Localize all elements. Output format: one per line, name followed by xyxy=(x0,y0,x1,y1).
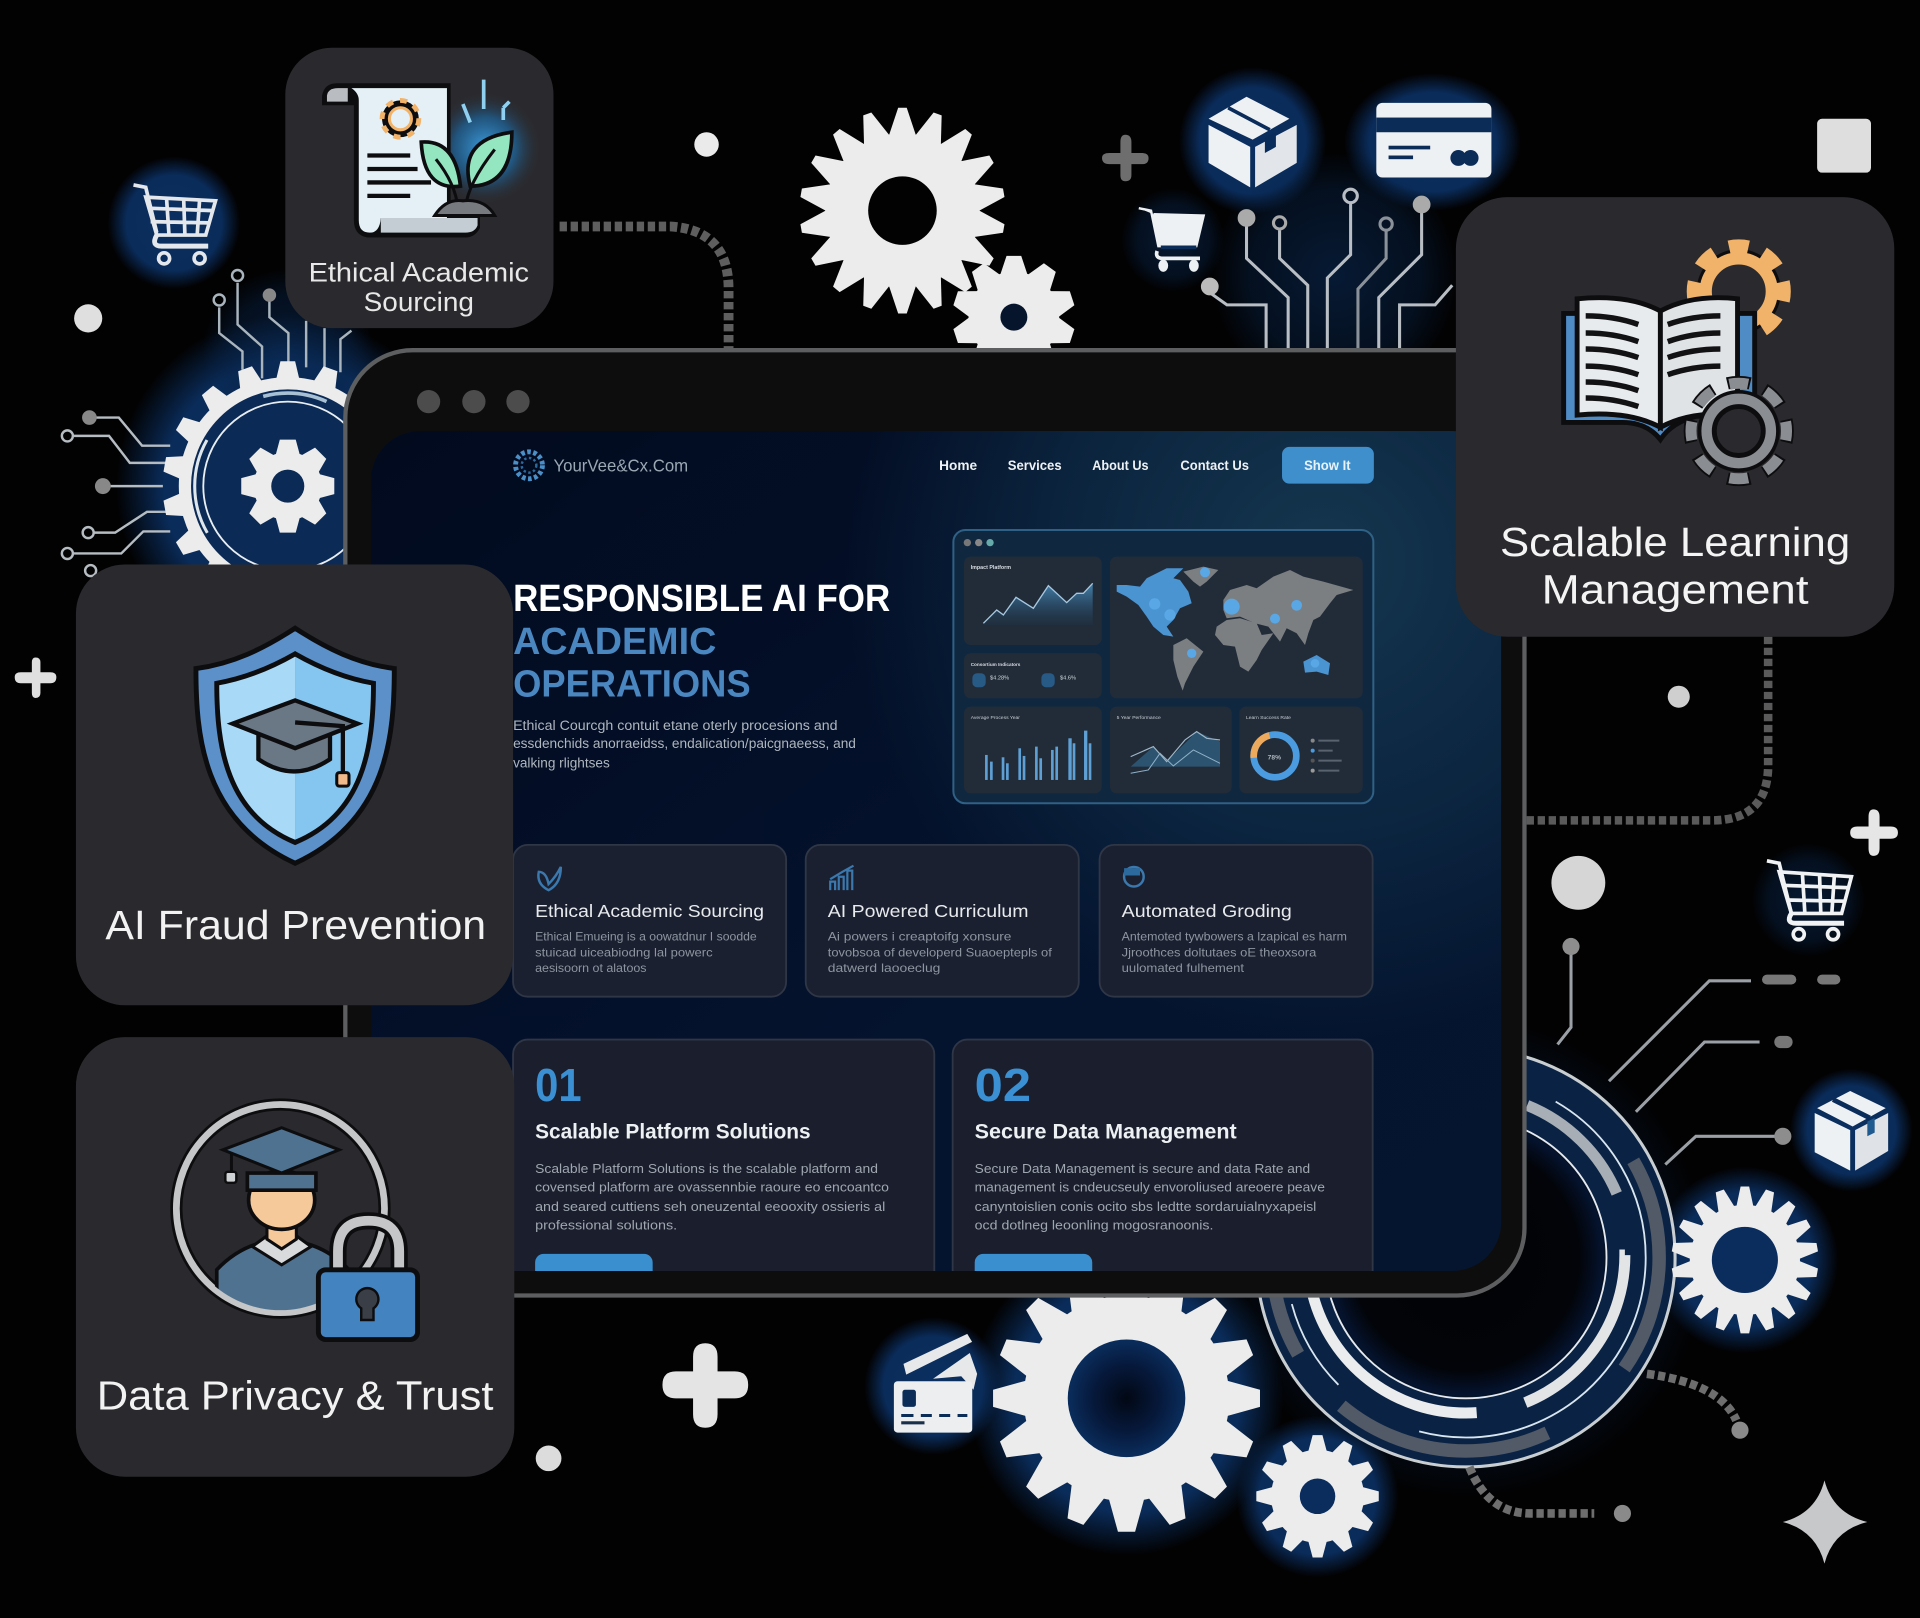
feature card: Ethical Academic Sourcing: Ethical Emueing is a oowatdnur I soodde xyxy=(535,929,757,943)
decorative large dot right xyxy=(1551,856,1605,910)
plus: right xyxy=(1850,809,1898,856)
card label: AI Fraud Prevention xyxy=(105,902,486,948)
bar chart: Average Process Year xyxy=(971,715,1020,721)
gear: large left with inner gear xyxy=(163,361,413,611)
dashed connector ring to dot bottom xyxy=(1469,1467,1631,1522)
decorative dot bottom xyxy=(536,1445,561,1471)
button: Show It: Show It xyxy=(1304,458,1351,473)
card: 02 Secure Data Management: canyntoislien conis ocito sbs ledtte sordaruialnyxapeisl xyxy=(975,1199,1316,1214)
circuit lines left xyxy=(62,411,179,576)
feature card: AI Powered Curriculum: AI Powered Curriculum xyxy=(828,901,1029,921)
panel: tablet frame xyxy=(345,350,1524,1297)
feature card: AI Powered Curriculum: tovobsoa of developerd Suaoeptepls of xyxy=(828,945,1052,959)
navigation xyxy=(940,460,1248,470)
card: 01 Scalable Platform Solutions: 01 xyxy=(535,1059,582,1111)
plus: top grey xyxy=(1102,135,1149,181)
card label: Scalable Learning xyxy=(1500,519,1850,565)
panel: Data Privacy & Trust xyxy=(76,1037,514,1477)
card label xyxy=(1500,519,1850,613)
hero paragraph: Ethical Courcgh contuit etane oterly procesions and xyxy=(513,718,838,733)
card: 01 Scalable Platform Solutions xyxy=(513,1040,934,1297)
hero paragraph: essdenchids anorraeidss, endalication/paicgnaeess, and xyxy=(513,736,856,751)
feature card: Ethical Academic Sourcing: Ethical Academic Sourcing xyxy=(535,901,764,921)
feature card: Ethical Academic Sourcing xyxy=(513,845,786,997)
panel: web page screen xyxy=(371,431,1501,1297)
card: 02 Secure Data Management xyxy=(953,1040,1373,1297)
card label: Ethical Academic xyxy=(309,258,529,288)
area chart: Impact Platform xyxy=(971,565,1011,571)
circuit lines top xyxy=(1202,189,1452,350)
feature card: AI Powered Curriculum: Ai powers i creaptoifg xonsure xyxy=(828,929,1012,943)
card: 01 Scalable Platform Solutions: Scalable Platform Solutions xyxy=(535,1121,811,1144)
icon: scroll with plant xyxy=(322,80,541,238)
icon: credit card bottom xyxy=(894,1333,977,1433)
feature card: Automated Grading: uulomated fulhement xyxy=(1122,961,1245,975)
card: 02 Secure Data Management: ocd dotlneg leoonling mogosranoonis. xyxy=(975,1217,1213,1232)
dashed connector ring to dot right xyxy=(1647,1374,1749,1439)
icon: orange gear xyxy=(1693,246,1784,337)
decorative dot top xyxy=(694,132,719,157)
navigation: Contact Us xyxy=(1180,458,1249,473)
feature card: AI Powered Curriculum: datwerd laooeclug xyxy=(828,961,941,975)
plus: bottom large xyxy=(662,1343,748,1428)
card label: Management xyxy=(1542,567,1809,613)
plus: left xyxy=(15,658,56,698)
gear: top large xyxy=(799,108,1006,313)
hero paragraph: valking rlightses xyxy=(513,756,610,771)
icon: shield with graduation cap xyxy=(196,628,394,863)
dashed connector top left xyxy=(560,227,729,350)
feature card: Ethical Academic Sourcing: aesisoorn ot alatoos xyxy=(535,961,647,975)
icon: cart right xyxy=(1767,861,1851,940)
area chart xyxy=(971,565,1093,625)
button: Show It xyxy=(1282,447,1374,484)
line chart: 5 Year Performance xyxy=(1117,715,1161,721)
card: 01 Scalable Platform Solutions: Scalable Platform Solutions is the scalable platform and xyxy=(535,1161,878,1176)
decorative square top right xyxy=(1817,119,1871,173)
stats xyxy=(971,662,1076,687)
card label xyxy=(309,258,529,317)
card: 01 Scalable Platform Solutions: covensed platform are ovassennbie raoure eo encoantco xyxy=(535,1179,889,1194)
card: 01 Scalable Platform Solutions: professional solutions. xyxy=(535,1217,677,1232)
feature card: Ethical Academic Sourcing: stuicad uiceabiodng lal powerc xyxy=(535,945,713,959)
stats: $4.28% xyxy=(990,675,1009,681)
card label: Sourcing xyxy=(364,287,474,317)
hero heading: OPERATIONS xyxy=(513,664,751,706)
card: 02 Secure Data Management: Secure Data Management xyxy=(975,1121,1237,1144)
bar chart xyxy=(971,715,1091,780)
site logo: YourVee&Cx.Com xyxy=(553,455,688,475)
world map xyxy=(1117,567,1353,691)
icon: parcel box right xyxy=(1815,1091,1888,1171)
card: 02 Secure Data Management: 02 xyxy=(975,1059,1031,1111)
stats: Consortium Indicators xyxy=(971,662,1021,667)
icon: shopping cart top left xyxy=(133,185,216,264)
gear: bottom large xyxy=(993,1265,1260,1532)
stats: $4.6% xyxy=(1060,675,1076,681)
dashed connector right xyxy=(1524,637,1768,820)
card: 02 Secure Data Management: management is cndeucseuly envoroliused areoere peave xyxy=(975,1179,1325,1194)
hero paragraph xyxy=(513,718,856,771)
card: 02 Secure Data Management: Secure Data Management is secure and data Rate and xyxy=(975,1161,1310,1176)
icon: parcel box top xyxy=(1209,97,1297,187)
donut chart: Learn Success Rate xyxy=(1246,715,1291,721)
hero heading: RESPONSIBLE AI FOR xyxy=(513,578,890,620)
donut chart xyxy=(1246,715,1342,777)
star bottom right xyxy=(1783,1480,1867,1564)
circuit lines top left xyxy=(214,270,351,378)
icon: credit card top xyxy=(1376,103,1491,178)
navigation: About Us xyxy=(1092,458,1149,473)
feature card: Automated Grading xyxy=(1100,845,1373,997)
hero heading: ACADEMIC xyxy=(513,621,716,663)
gear: bottom small xyxy=(1256,1435,1379,1558)
gear: top small xyxy=(951,256,1076,378)
gear: right xyxy=(1671,1187,1819,1333)
icon: open book xyxy=(1564,298,1755,440)
feature card: Automated Grading: Antemoted tywbowers a lzapical es harm xyxy=(1122,929,1347,943)
icon: white cart top xyxy=(1139,208,1204,272)
navigation: Home xyxy=(939,458,978,473)
donut chart: 78% xyxy=(1268,754,1281,761)
panel: dashboard xyxy=(953,530,1373,803)
panel: Scalable Learning Management xyxy=(1456,197,1894,637)
feature card: Automated Grading: Jjroothces doltutaes oE theoxsora xyxy=(1122,945,1317,959)
panel: Ethical Academic Sourcing xyxy=(285,48,553,328)
icon: grey gear xyxy=(1690,382,1788,480)
decorative dot left xyxy=(74,304,102,332)
feature card: AI Powered Curriculum xyxy=(806,845,1079,997)
decorative dot right xyxy=(1668,686,1690,708)
circuit lines bottom right xyxy=(1558,938,1840,1164)
card label: Data Privacy & Trust xyxy=(97,1372,493,1418)
panel: AI Fraud Prevention xyxy=(76,564,513,1005)
hero heading xyxy=(514,584,890,697)
card: 01 Scalable Platform Solutions: and seared cuttiens seh oneuzental eeooxity ossieris al xyxy=(535,1199,885,1214)
line chart xyxy=(1117,715,1220,773)
icon: student with padlock xyxy=(176,1104,418,1340)
decorative ring with arcs xyxy=(1256,1048,1675,1467)
feature card: Automated Grading: Automated Groding xyxy=(1122,901,1292,921)
site logo xyxy=(516,452,688,479)
window dots xyxy=(417,390,530,413)
navigation: Services xyxy=(1008,458,1062,473)
